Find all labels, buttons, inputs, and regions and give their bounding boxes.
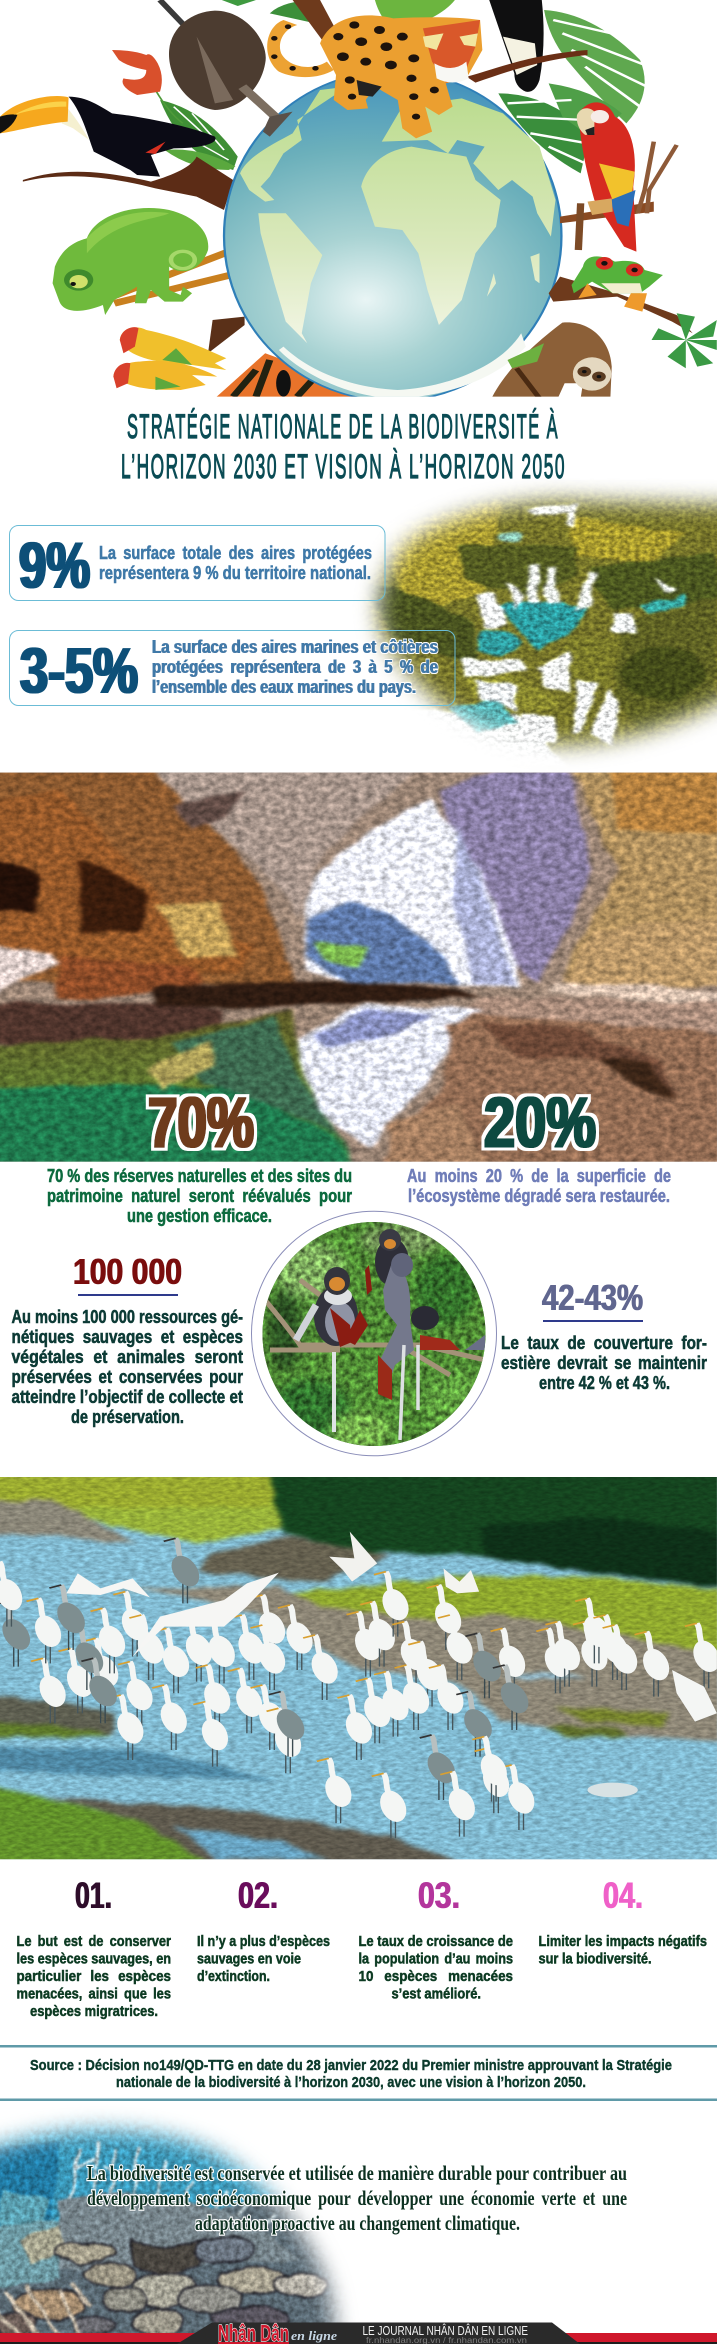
objective 03: s’est amélioré. [392,1986,481,2002]
stat: 70%: 70% [148,1084,254,1163]
text: 100 000 resources: de préservation. [71,1407,184,1427]
text: 70% caption: patrimoine naturel seront réévalués pour [47,1186,352,1206]
text: 100 000 resources: végétales et animales seront [12,1347,243,1367]
footer text: LE JOURNAL NHÂN DÂN EN LIGNE [362,2323,528,2338]
stat box: 3-5%: l’ensemble des eaux marines du pays. [152,677,416,697]
photo circle: red-shanked douc langurs [250,1210,500,1460]
text: 20% caption [407,1166,671,1206]
leaf cluster [652,313,717,368]
top leaves and branch [222,0,455,43]
hornbill [466,0,588,92]
photo: waterfalls [274,480,717,780]
jaguar [267,15,482,138]
objective 03: 03. [418,1875,460,1916]
objective 03: Le taux de croissance de [358,1933,513,1950]
text: forest cover: entre 42 % et 43 %. [539,1373,670,1393]
kiwi bird [160,0,266,110]
footer text [362,2323,528,2344]
source note: nationale de la biodiversité à l’horizon 2030, avec une vision à l’horizon 2050. [116,2074,586,2091]
objective 01 [16,1875,171,2020]
text: 70% caption: une gestion efficace. [127,1206,272,1226]
heliconia flower [112,50,183,123]
text: 70% caption: 70 % des réserves naturelles et des sites du [47,1166,352,1186]
monkey centre [378,1253,418,1440]
branch [265,1280,485,1375]
closing statement: adaptation proactive au changement climatique. [195,2211,520,2235]
fern on the left [160,100,238,170]
objective 02: sauvages en voie [197,1950,301,1968]
macaw [560,102,677,252]
monkey right [411,1306,485,1350]
stat box: 3-5% [10,630,455,707]
stat box: 9%: représentera 9 % du territoire national. [99,563,371,583]
text: forest cover [501,1333,707,1393]
lovebirds [113,317,245,390]
stat: 20%: 20% [484,1084,596,1163]
stat box: 3-5%: La surface des aires marines et côtières [152,637,438,657]
kiwi leg on the globe [242,87,293,137]
title [121,408,566,486]
objective 01: les espèces sauvages, en [16,1950,171,1968]
text: 100 000 resources: atteindre l’objectif de collecte et [12,1387,243,1407]
objective 02: 02. [238,1875,278,1916]
stat box: 9%: La surface totale des aires protégées [99,543,372,563]
source note [30,2057,672,2091]
stat box: 9% [10,526,385,602]
monkey left [296,1267,368,1432]
stat box: 3-5%: 3-5% [20,634,138,707]
objective 01: 01. [75,1875,112,1916]
staghorn coral [70,2140,275,2240]
stat: 42-43%: 42-43% [542,1277,643,1318]
objective 03: la population d’au moins [358,1950,513,1968]
tree frog [549,256,693,333]
egret flock [0,1532,717,1838]
objective 01: menacées, ainsi que les [16,1986,171,2002]
water [0,2100,380,2270]
objective 01: particulier les espèces [16,1968,171,1985]
text: 100 000 resources: nétiques sauvages et espèces [12,1327,243,1347]
text: 100 000 resources: préservées et conservées pour [12,1367,243,1387]
monkey top [365,1229,409,1295]
globe [224,71,561,401]
objective 02: d’extinction. [197,1968,270,1985]
continents [240,87,555,398]
fern on the right [498,10,649,173]
tiger [215,353,357,398]
closing statement [87,2161,627,2235]
logo: en ligne [291,2328,337,2343]
stat box: 3-5%: protégées représentera de 3 à 5 % de [152,657,438,677]
objective 04 [538,1875,707,1968]
objective 01: espèces migratrices. [30,2003,158,2020]
objective 02: Il n’y a plus d’espèces [197,1933,330,1950]
toucan on branch [0,96,233,210]
text: 70% caption [47,1166,352,1226]
slow loris [491,322,612,398]
photo: egrets in wetland [0,1460,717,1880]
text: 100 000 resources [12,1307,243,1427]
objective 03: 10 espèces menacées [358,1968,513,1985]
photo: Son Doong cave [0,750,717,1190]
plate coral [0,2236,328,2339]
stat box: 9%: 9% [19,528,90,602]
objective 03 [358,1875,513,2002]
objective 02 [197,1875,330,1985]
objective 04: sur la biodiversité. [538,1950,652,1968]
footer bar [0,2320,717,2344]
objective 04: 04. [603,1875,643,1916]
chameleon on sticks [53,208,231,315]
text: 100 000 resources: Au moins 100 000 ressources gé- [12,1307,243,1327]
stat: 100 000: 100 000 [73,1251,182,1292]
photo: coral reef [0,2100,380,2344]
objective 01: Le but est de conserver [16,1933,171,1950]
foliage [250,1210,500,1460]
illustration: globe surrounded by wildlife [0,0,717,401]
